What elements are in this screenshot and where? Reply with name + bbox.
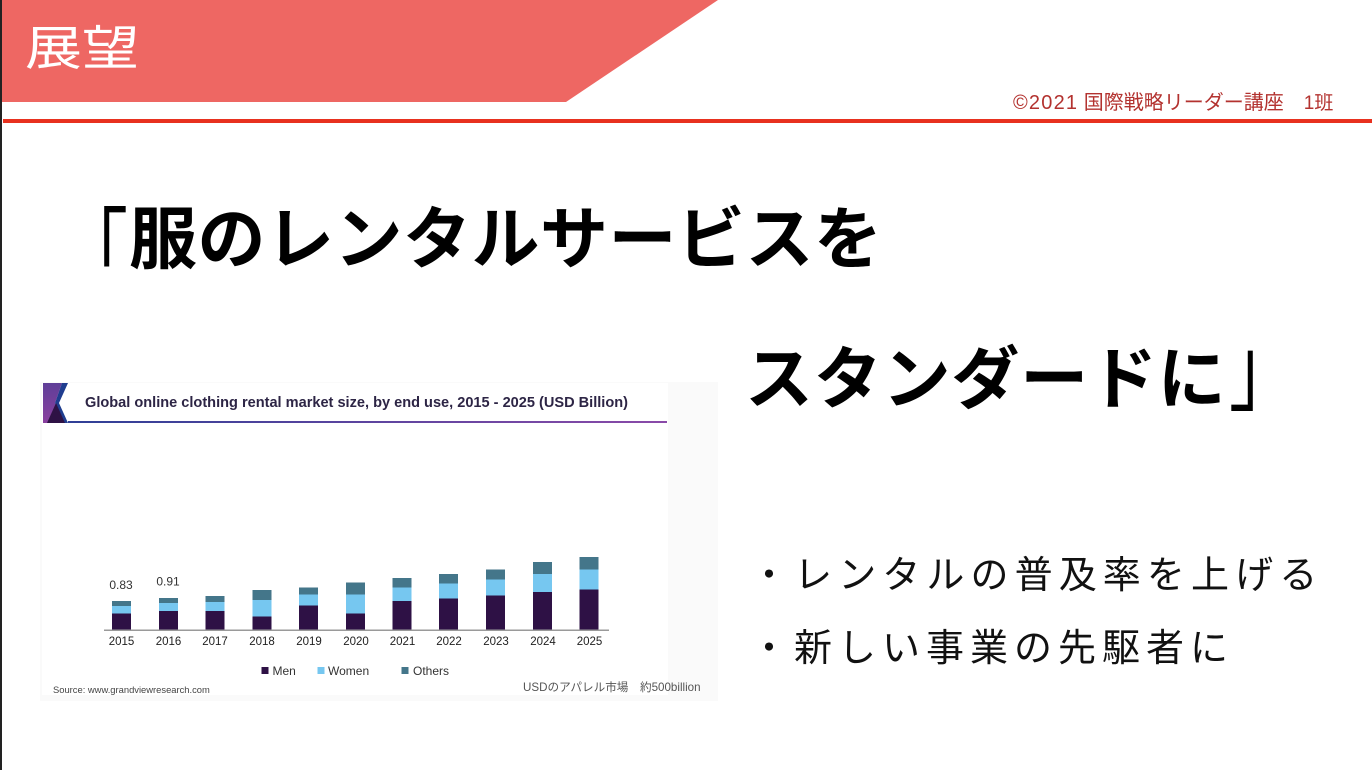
bar 2017 [206,596,224,630]
icon: chart logo [43,383,68,423]
year labels: 2022 [436,636,462,648]
year labels: 2017 [202,636,228,648]
year labels: 2018 [249,636,275,648]
main message line 1 [60,202,883,306]
legend: Others [413,664,449,678]
bar 2023 [486,570,505,630]
bar 2022 [439,574,458,630]
opening bracket: 「 [60,202,128,306]
year labels: 2019 [296,636,322,648]
chart background [40,382,718,701]
chart source: Source: www.grandviewresearch.com [53,684,210,695]
legend: Men [272,664,296,678]
red header rule [3,119,1372,123]
legend [262,664,449,678]
chart title rule [68,421,667,423]
bullet 1: ・レンタルの普及率を上げる [750,555,1323,597]
bar 2019 [299,588,318,630]
bullet 2: ・新しい事業の先駆者に [750,628,1234,670]
year labels: 2020 [343,636,369,648]
year labels: 2015 [109,636,134,648]
header banner [2,0,718,102]
chart axis [104,630,609,631]
bar 2020 [346,582,365,630]
apparel market note: USDのアパレル市場 約500billion [523,680,701,694]
bar 2016 [159,598,178,630]
chart title: Global online clothing rental market size, by end use, 2015 - 2025 (USD Billion) [85,395,628,411]
bar 2015 [112,601,131,630]
year labels: 2021 [390,636,415,648]
bar 2021 [392,578,412,630]
year labels: 2025 [577,636,602,648]
year labels: 2016 [156,636,181,648]
legend: Women [328,664,369,678]
stacked bar chart [104,557,609,648]
value labels: 0.91 [156,574,180,588]
year labels: 2024 [530,636,556,648]
copyright note: ©2021 国際戦略リーダー講座 1班 [1013,92,1333,114]
line 2 text: スタンダードに [745,342,1227,418]
value labels [109,574,180,592]
bar 2018 [252,590,272,630]
heading: 展望: 展望 [25,22,139,76]
closing bracket: 」 [1229,319,1297,424]
value labels: 0.83 [109,578,133,592]
year labels [109,636,602,648]
left edge bar [0,0,2,770]
main message line 2 [745,319,1297,424]
bar 2024 [533,562,552,630]
line 1 text: 服のレンタルサービスを [129,202,883,278]
bar 2025 [580,557,598,630]
year labels: 2023 [483,636,509,648]
bullet list [750,555,1323,670]
